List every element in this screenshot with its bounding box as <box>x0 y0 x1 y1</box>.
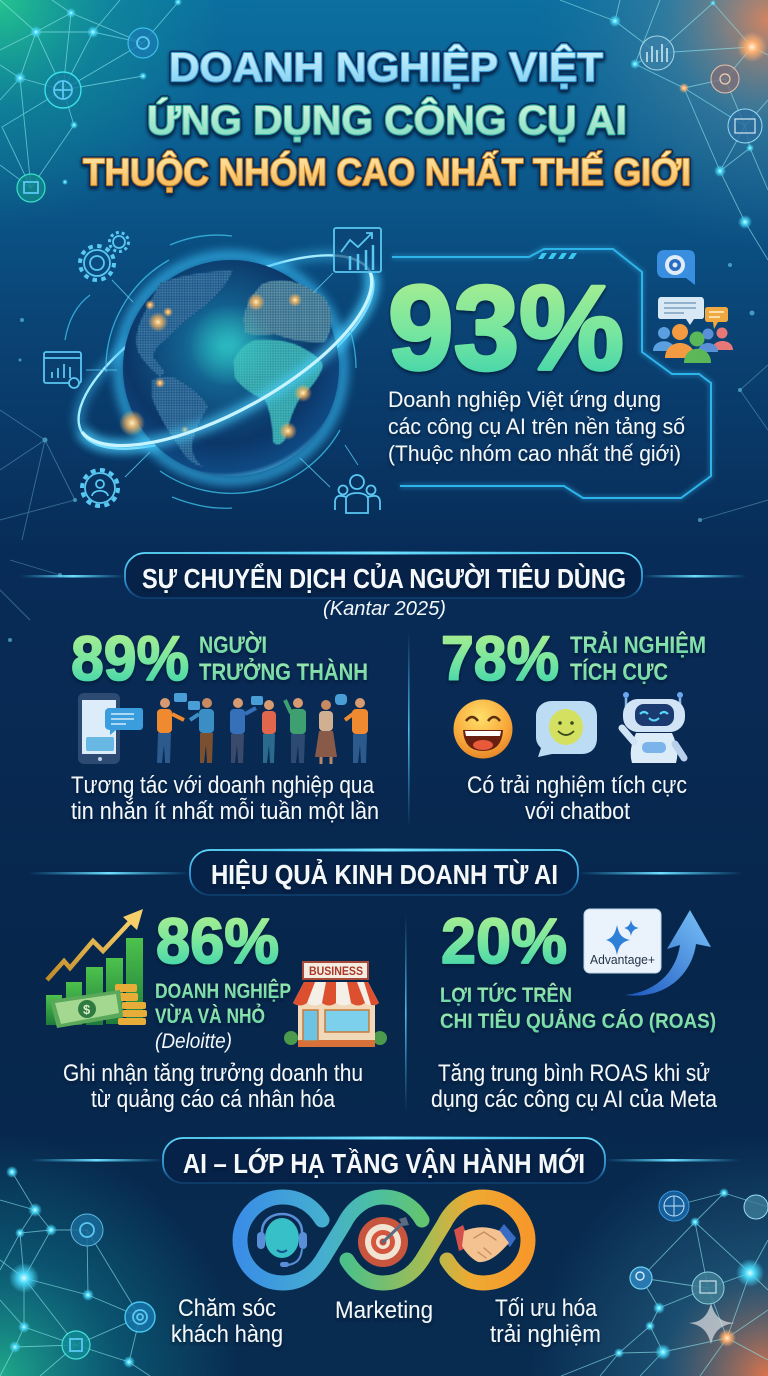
icon: business shop <box>284 962 387 1047</box>
icon: analytics window <box>44 352 81 388</box>
person 5 <box>285 698 306 763</box>
title line 1: DOANH NGHIỆP VIỆT <box>169 44 603 90</box>
labels: AI applications: Tối ưu hóa <box>495 1295 598 1322</box>
section heading: consumer shift: SỰ CHUYỂN DỊCH CỦA NGƯỜI TIÊU DÙNG <box>142 562 626 594</box>
description: Có trải nghiệm tích cực <box>467 772 687 799</box>
person 2 <box>190 698 214 763</box>
description <box>431 1060 718 1113</box>
panel: 86% SMEs <box>46 905 387 1113</box>
icon: gear with person <box>82 470 118 506</box>
section heading: business results <box>28 848 743 895</box>
stat description: Doanh nghiệp Việt ứng dụng <box>388 387 661 412</box>
description: từ quảng cáo cá nhân hóa <box>91 1086 336 1113</box>
green-to-orange ribbon <box>347 1197 528 1283</box>
panel: 89% adults <box>71 624 379 825</box>
panel: 93% stat frame <box>388 249 711 498</box>
continents: europe and asia <box>243 280 332 342</box>
network: middle left and right faint <box>0 263 768 642</box>
icon: speech bubbles <box>658 297 728 329</box>
labels: AI applications: Marketing <box>335 1297 433 1324</box>
continents: south america <box>152 376 208 467</box>
globe sphere <box>123 260 339 476</box>
description <box>71 772 379 825</box>
person 4 <box>262 700 276 763</box>
source: Deloitte: (Deloitte) <box>155 1030 232 1053</box>
description <box>63 1060 363 1113</box>
title line 2: ỨNG DỤNG CÔNG CỤ AI <box>147 97 627 143</box>
icon: chart box <box>334 228 381 272</box>
description: tin nhắn ít nhất mỗi tuần một lần <box>71 798 379 825</box>
diagram: three-loop ribbon <box>240 1197 528 1283</box>
illustration: people chatting <box>157 693 368 764</box>
label: CHI TIÊU QUẢNG CÁO (ROAS) <box>440 1009 716 1033</box>
big number: 93% <box>388 261 624 395</box>
number 20%: 20% <box>441 905 567 977</box>
icon: handshake <box>454 1224 516 1262</box>
labels: AI applications: khách hàng <box>171 1321 283 1348</box>
title line 1: DOANH NGHIỆP VIỆT <box>169 44 603 90</box>
connector lines <box>86 273 358 487</box>
icon: headset agent <box>257 1214 307 1267</box>
label: TÍCH CỰC <box>570 658 668 686</box>
continents: africa <box>233 340 323 445</box>
title <box>83 44 691 194</box>
person 6 <box>315 700 337 764</box>
title line 3: THUỘC NHÓM CAO NHẤT THẾ GIỚI <box>83 149 691 194</box>
globe halo <box>119 256 343 480</box>
panel: 20% ROAS <box>431 905 718 1113</box>
network: top left <box>0 0 182 202</box>
blue-to-green ribbon <box>240 1197 422 1283</box>
city lights <box>145 293 312 440</box>
icon: team outline <box>335 475 380 513</box>
card: Advantage+ <box>584 909 661 973</box>
description: dụng các công cụ AI của Meta <box>431 1086 718 1113</box>
globe illustration <box>52 218 400 508</box>
icon: robot <box>622 692 685 763</box>
divider <box>408 632 410 827</box>
number 89%: 89% <box>71 624 189 694</box>
source: Kantar: (Kantar 2025) <box>323 598 446 620</box>
description: Tăng trung bình ROAS khi sử <box>438 1060 710 1087</box>
label: NGƯỜI <box>199 631 267 659</box>
labels: AI applications: trải nghiệm <box>490 1321 601 1348</box>
number 78%: 78% <box>441 624 559 694</box>
number 86%: 86% <box>156 905 279 977</box>
description: Tương tác với doanh nghiệp qua <box>71 772 375 799</box>
icon: growth chart and money <box>46 909 147 1028</box>
orbit ring back <box>52 218 400 486</box>
stat description: các công cụ AI trên nền tảng số <box>388 414 685 439</box>
section heading: consumer shift <box>20 552 747 598</box>
panel: 78% positive experience <box>441 624 706 825</box>
description: với chatbot <box>525 798 630 825</box>
person 7 <box>345 698 368 763</box>
title line 3: THUỘC NHÓM CAO NHẤT THẾ GIỚI <box>83 149 691 194</box>
network: bottom right <box>561 1188 768 1376</box>
icon: phone <box>78 693 143 764</box>
divider <box>405 915 407 1112</box>
label <box>155 979 291 1028</box>
orbit ring front <box>82 272 372 446</box>
card: Advantage+: Advantage+ <box>590 953 655 967</box>
label <box>199 631 368 686</box>
section heading: AI infrastructure: AI – LỚP HẠ TẦNG VẬN HÀNH MỚI <box>183 1148 585 1179</box>
label: DOANH NGHIỆP <box>155 979 291 1003</box>
labels: AI applications <box>171 1295 601 1348</box>
network: top right <box>560 0 768 260</box>
icon: target <box>358 1217 409 1267</box>
person 3 <box>230 698 256 763</box>
ocean core glow <box>190 303 274 387</box>
label <box>570 630 706 686</box>
outer rim arcs <box>65 235 356 508</box>
person 1 <box>157 698 184 763</box>
label: TRƯỞNG THÀNH <box>199 657 368 686</box>
stat description <box>388 387 685 466</box>
frame outline <box>392 249 711 498</box>
description <box>467 772 687 825</box>
continents: north and central america <box>136 270 233 377</box>
icon: smile bubble <box>536 701 597 757</box>
icon: growth chart and money: $ <box>83 1002 91 1017</box>
description: Ghi nhận tăng trưởng doanh thu <box>63 1060 363 1087</box>
network: bottom left <box>0 1166 155 1376</box>
label: LỢI TỨC TRÊN <box>440 983 572 1007</box>
stat description: (Thuộc nhóm cao nhất thế giới) <box>388 441 681 466</box>
label: TRẢI NGHIỆM <box>570 630 706 659</box>
watermark sparkle <box>689 1303 735 1344</box>
icon: user group <box>653 324 733 363</box>
icon: gears <box>80 232 128 280</box>
icon: laughing emoji <box>454 700 512 758</box>
labels: AI applications: Chăm sóc <box>178 1295 276 1322</box>
section heading: AI infrastructure <box>30 1136 740 1183</box>
label <box>440 983 716 1033</box>
title line 2: ỨNG DỤNG CÔNG CỤ AI <box>147 97 627 143</box>
label: VỪA VÀ NHỎ <box>155 1004 265 1028</box>
section heading: business results: HIỆU QUẢ KINH DOANH TỪ AI <box>211 858 558 890</box>
arrow: growth <box>625 910 711 996</box>
icon: blue chat gear <box>657 250 695 285</box>
chat bubbles <box>174 693 347 710</box>
icon: business shop: BUSINESS <box>309 966 363 978</box>
